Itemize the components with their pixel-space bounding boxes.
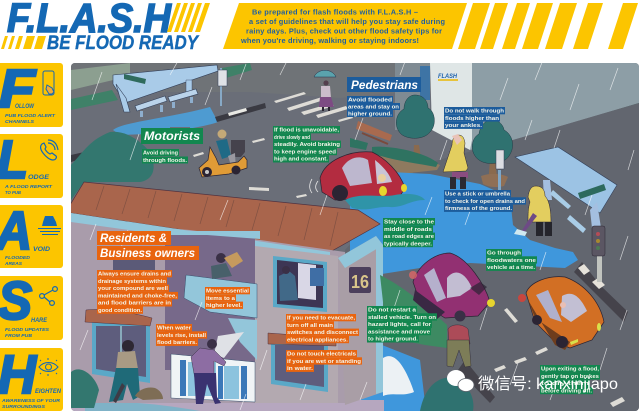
green bush by purple car <box>380 275 447 348</box>
upper flood pool <box>350 172 578 275</box>
card: Share <box>0 271 63 340</box>
card: Avoid <box>0 201 63 268</box>
card: Avoid: FLOODED <box>5 255 31 260</box>
white foam <box>383 356 414 396</box>
card: Heighten: AWARENESS OF YOUR <box>1 398 61 403</box>
card: Share: HARE <box>31 317 48 324</box>
text: upon exiting a flood: Upon exiting a flood, <box>541 366 600 372</box>
icon: car in flood <box>38 216 61 235</box>
text: move essential items <box>205 287 250 309</box>
text: if you need to evacuate <box>286 314 359 343</box>
text: if flood is unavoidable: If flood is unavoidable, <box>274 128 340 134</box>
card: Lodge: A FLOOD REPORT <box>4 184 53 189</box>
card: Heighten: EIGHTEN <box>35 388 61 395</box>
tree by Pedestrians <box>396 94 435 154</box>
text: when water levels rise: flood barriers. <box>157 340 198 346</box>
text: use a stick or umbrella <box>444 190 526 212</box>
panel: flood street scene <box>70 59 639 411</box>
text: upon exiting a flood: before driving off. <box>541 388 593 394</box>
header banner: introduction text: a set of guidelines that will help you stay safe during <box>249 17 445 26</box>
text: if flood is unavoidable: drive slowly and <box>274 135 310 141</box>
text: do not touch electricals <box>286 350 362 372</box>
text: move essential items: items to a <box>206 296 236 302</box>
card: Lodge <box>0 130 63 198</box>
lower road edge <box>345 103 639 411</box>
text: avoid driving <box>142 149 188 164</box>
building with FLASH sign <box>395 63 639 150</box>
card: Share: FLOOD UPDATES <box>5 327 50 332</box>
card: Lodge: ODGE <box>28 174 50 181</box>
text: do not walk through floods: Do not walk through <box>445 108 504 114</box>
card: Follow: CHANNELS <box>5 119 35 124</box>
text: if flood is unavoidable: steadily. Avoid braking <box>274 142 340 148</box>
top-left window <box>113 260 155 270</box>
card: Follow: PUB FLOOD ALERT <box>5 113 56 118</box>
text: do not restart a stalled vehicle: assistance and move <box>368 329 430 335</box>
text: stay close to the middle: typically deeper. <box>384 241 433 247</box>
card: Avoid: AREAS <box>4 261 23 266</box>
text: if you need to evacuate: turn off all main <box>287 323 333 329</box>
left window and awning <box>85 309 152 383</box>
house walls <box>71 213 383 405</box>
house number 16 <box>349 267 371 293</box>
watermark <box>447 370 618 393</box>
text: do not restart a stalled vehicle: Do not restart a <box>368 308 417 314</box>
text: do not restart a stalled vehicle: stalled vehicle. Turn on <box>368 315 436 321</box>
lower right window and awning <box>268 333 336 392</box>
text: use a stick or umbrella: Use a stick or umbrella <box>445 192 511 198</box>
text: always ensure drains: good condition. <box>98 308 143 314</box>
text: go through floodwaters <box>486 249 537 271</box>
person pushing barrier <box>191 339 226 404</box>
text: avoid driving: through floods. <box>143 158 188 164</box>
text: stay close to the middle: Stay close to the <box>384 220 434 226</box>
text: always ensure drains: and flood barriers are in <box>98 301 171 307</box>
card: Avoid: VOID <box>33 246 50 253</box>
text: if flood is unavoidable: to keep engine speed <box>274 149 336 155</box>
heading: Residents and Business owners: Residents & <box>100 231 167 245</box>
woman with shovel and sandbags <box>109 340 163 403</box>
text: if flood is unavoidable <box>273 126 341 163</box>
watermark: 微信号: kanxinjiapo <box>478 375 618 393</box>
man carrying box <box>211 252 243 279</box>
bench and planters <box>350 121 440 174</box>
card: Follow <box>0 59 63 127</box>
icon: share <box>40 287 57 305</box>
text: do not walk through floods: floods higher than <box>445 116 499 122</box>
card: Follow: OLLOW <box>15 103 35 110</box>
text: use a stick or umbrella: firmness of the ground. <box>445 206 513 212</box>
text: when water levels rise <box>156 324 207 346</box>
orange car <box>518 277 604 350</box>
planter on right wall <box>594 105 639 131</box>
text: use a stick or umbrella: to check for open drains and <box>445 199 525 205</box>
purple car <box>409 253 495 320</box>
bush left <box>71 132 154 200</box>
text: always ensure drains <box>97 270 178 314</box>
balcony and stairs <box>184 275 257 360</box>
text: when water levels rise: levels rise, install <box>157 333 207 339</box>
text: avoid driving: Avoid driving <box>143 150 178 156</box>
text: do not walk through floods: your ankles. <box>445 123 483 129</box>
text: always ensure drains: drainage systems within <box>98 279 166 285</box>
header banner: introduction text: when you're driving, walking or staying indoors! <box>240 36 419 45</box>
text: always ensure drains: your compound are well <box>98 286 169 292</box>
text: avoid flooded areas: higher ground. <box>348 112 393 118</box>
text: go through floodwaters: Go through <box>487 250 521 256</box>
card: Heighten: SURROUNDINGS <box>2 404 46 409</box>
man with umbrella stick <box>514 186 552 236</box>
text: upon exiting a flood: to dry them <box>541 381 589 387</box>
card: Lodge: TO PUB <box>5 190 22 195</box>
header banner: introduction text: Be prepared for flash floods with F.L.A.S.H – <box>252 8 418 16</box>
puddle at shelter <box>113 107 218 135</box>
window with person <box>273 256 327 312</box>
road markings <box>193 92 625 407</box>
flood barrier <box>171 354 255 402</box>
text: avoid flooded areas: areas and stay on <box>348 104 399 110</box>
card: Share: FROM PUB <box>5 333 33 338</box>
lower flood channel <box>360 346 424 411</box>
bush bottom <box>420 377 473 411</box>
text: if you need to evacuate: electrical appliances. <box>287 337 349 343</box>
heading: Pedestrians: Pedestrians <box>351 78 418 92</box>
bush bottom left <box>71 369 99 408</box>
kerb medians <box>71 103 628 403</box>
heading: Residents and Business owners <box>97 231 199 260</box>
text: do not walk through floods <box>444 107 505 129</box>
text: do not restart a stalled vehicle: hazard lights, call for <box>368 322 432 328</box>
heading: Motorists: Motorists <box>144 129 200 143</box>
text: move essential items: Move essential <box>206 288 250 294</box>
text: go through floodwaters: vehicle at a time. <box>487 265 536 271</box>
text: stay close to the middle: middle of roads <box>384 227 432 233</box>
icon: telephone <box>41 140 58 160</box>
text: always ensure drains: Always ensure drains and <box>98 272 171 278</box>
text: go through floodwaters: floodwaters one <box>487 258 536 264</box>
text: move essential items: higher level. <box>206 303 243 309</box>
text: avoid flooded areas <box>347 96 400 118</box>
text: if you need to evacuate: If you need to evacuate, <box>287 316 356 322</box>
card: Heighten <box>0 345 63 411</box>
text: always ensure drains: maintained and choke-free, <box>98 293 178 299</box>
back wall and hedges top left <box>71 63 252 110</box>
text: avoid flooded areas: Avoid flooded <box>348 98 392 104</box>
text: stay close to the middle: as road edges are <box>384 234 434 240</box>
house number 16: 16 <box>351 272 369 292</box>
yellow raincoat pedestrian <box>443 134 468 189</box>
header logo: F.L.A.S.H Be Flood Ready: BE FLOOD READY <box>47 33 200 54</box>
house roof <box>70 182 380 252</box>
text: do not touch electricals: if you are wet or standing <box>287 359 361 365</box>
header logo: F.L.A.S.H Be Flood Ready <box>1 0 210 54</box>
header banner: introduction text: rainy days. Plus, check out other flood safety tips for <box>246 26 442 36</box>
building with FLASH sign: FLASH <box>438 74 458 80</box>
text: do not touch electricals: Do not touch electricals <box>287 352 356 358</box>
woman on phone <box>447 310 471 367</box>
text: if flood is unavoidable: high and constant. <box>274 157 329 163</box>
icon: bus shelter right <box>515 147 617 233</box>
text: stay close to the middle <box>383 218 435 247</box>
tree and sign centre <box>472 122 513 190</box>
icon: bus shelter left <box>113 65 227 117</box>
text: do not restart a stalled vehicle: to higher ground. <box>368 337 419 343</box>
rain <box>80 59 634 410</box>
icon: eye <box>39 358 58 376</box>
text: upon exiting a flood <box>540 365 600 394</box>
header banner: introduction text <box>223 3 467 49</box>
text: if you need to evacuate: switches and disconnect <box>287 330 358 336</box>
text: do not touch electricals: in water. <box>287 366 314 372</box>
red car <box>310 152 425 209</box>
text: when water levels rise: When water <box>157 326 192 332</box>
text: do not restart a stalled vehicle <box>367 306 437 343</box>
ground strip in front of house <box>71 400 384 411</box>
icon: phone <box>43 71 54 95</box>
person with umbrella <box>314 70 336 111</box>
traffic light <box>592 226 605 282</box>
text: upon exiting a flood: gently tap on brakes <box>541 374 599 380</box>
motorcyclist <box>199 130 247 177</box>
header stripes <box>458 3 638 49</box>
heading: Residents and Business owners: Business owners <box>100 246 195 260</box>
